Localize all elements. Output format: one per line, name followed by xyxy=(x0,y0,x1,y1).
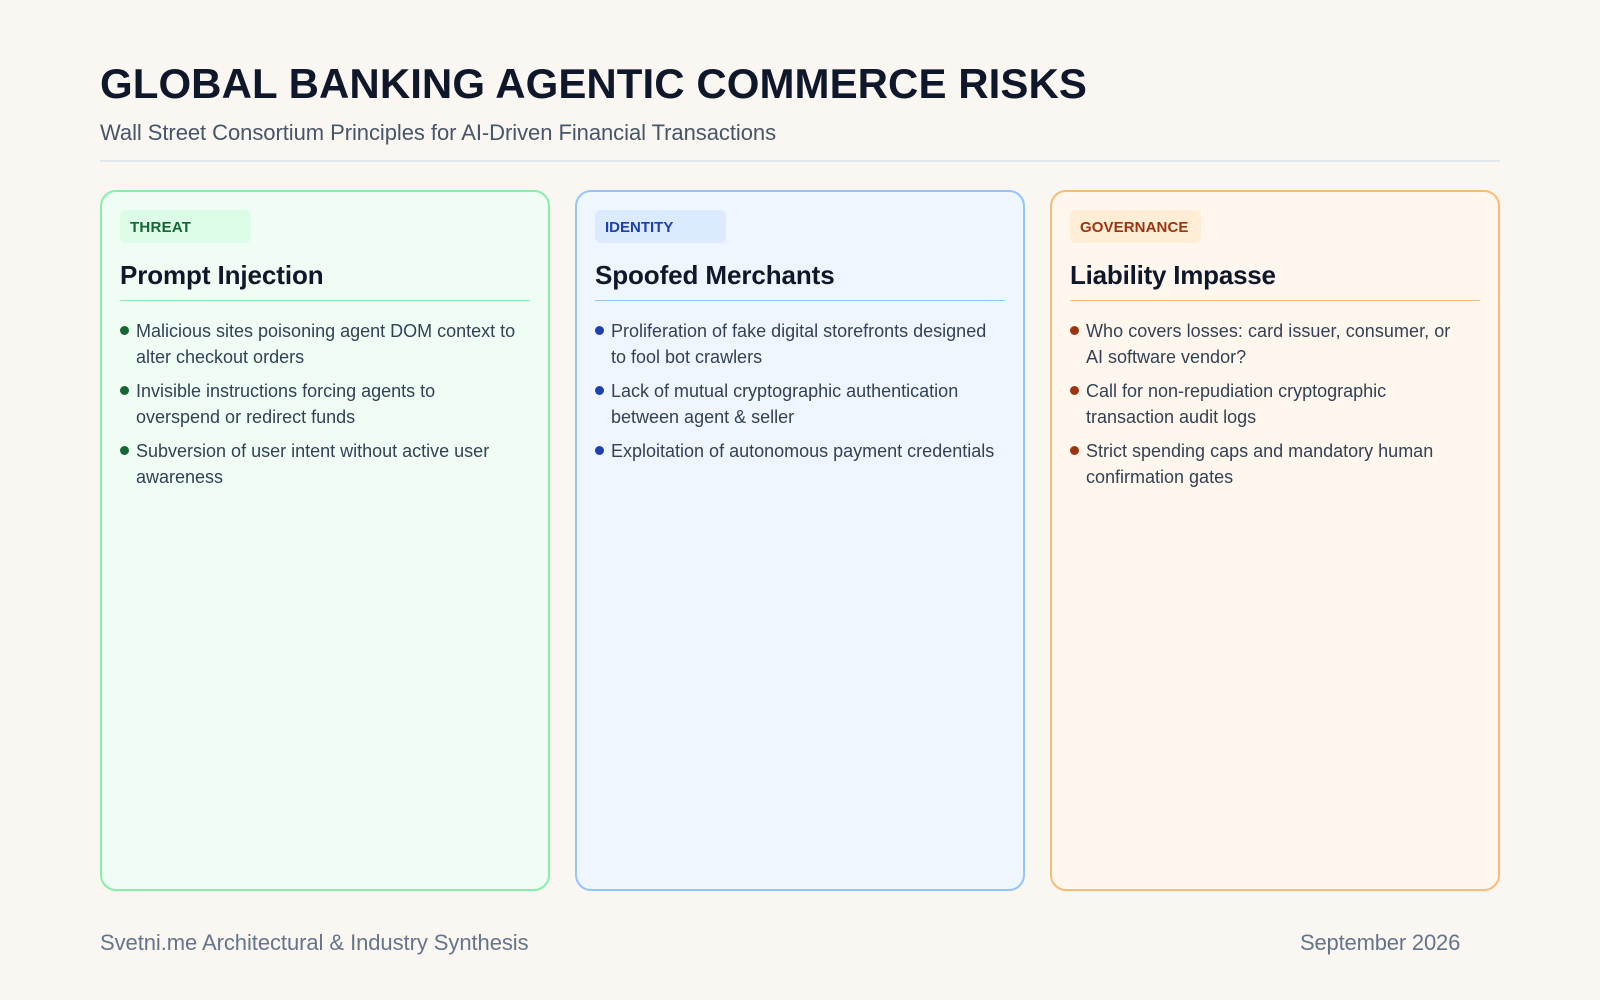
panel: threat xyxy=(100,190,550,891)
footer date: September 2026 xyxy=(1300,930,1460,955)
badge: threat xyxy=(120,210,251,243)
bullet 1: AI software vendor? xyxy=(1086,347,1246,367)
bullet 1: Proliferation of fake digital storefronts designed xyxy=(611,321,986,341)
panel: governance xyxy=(1050,190,1500,891)
heading: prompt injection: Prompt Injection xyxy=(120,260,324,290)
badge: identity: IDENTITY xyxy=(605,219,673,236)
bullet 1: Who covers losses: card issuer, consumer, or xyxy=(1086,321,1450,341)
bullet 2 xyxy=(595,381,958,427)
bullet 3 xyxy=(1070,441,1433,487)
panel: identity xyxy=(575,190,1025,891)
badge: identity xyxy=(595,210,726,243)
bullet 1: to fool bot crawlers xyxy=(611,347,762,367)
bullet 3: awareness xyxy=(136,467,223,487)
heading: liability impasse: Liability Impasse xyxy=(1070,260,1276,290)
bullet 2 xyxy=(120,381,435,427)
subtitle: Wall Street Consortium Principles for AI-Driven Financial Transactions xyxy=(100,120,776,145)
bullet 2 xyxy=(1070,381,1386,427)
bullet 2: overspend or redirect funds xyxy=(136,407,355,427)
heading: spoofed merchants: Spoofed Merchants xyxy=(595,260,835,290)
bullet 1: Malicious sites poisoning agent DOM context to xyxy=(136,321,515,341)
bullet 1: alter checkout orders xyxy=(136,347,304,367)
bullet 2: Lack of mutual cryptographic authentication xyxy=(611,381,958,401)
bullet 2: Invisible instructions forcing agents to xyxy=(136,381,435,401)
bullet 2: Call for non-repudiation cryptographic xyxy=(1086,381,1386,401)
bullet 1 xyxy=(595,321,986,367)
bullet 1 xyxy=(120,321,515,367)
title: GLOBAL BANKING AGENTIC COMMERCE RISKS xyxy=(100,60,1087,107)
badge: governance xyxy=(1070,210,1201,243)
badge: governance: GOVERNANCE xyxy=(1080,219,1189,236)
badge: threat: THREAT xyxy=(130,219,191,236)
bullet 3: Strict spending caps and mandatory human xyxy=(1086,441,1433,461)
bullet 2: transaction audit logs xyxy=(1086,407,1256,427)
footer source: Svetni.me Architectural & Industry Synthesis xyxy=(100,930,529,955)
bullet 1 xyxy=(1070,321,1450,367)
bullet 3: confirmation gates xyxy=(1086,467,1233,487)
bullet 3: Subversion of user intent without active user xyxy=(136,441,489,461)
bullet 3 xyxy=(120,441,489,487)
bullet 2: between agent & seller xyxy=(611,407,794,427)
bullet 3: Exploitation of autonomous payment credentials xyxy=(611,441,994,461)
